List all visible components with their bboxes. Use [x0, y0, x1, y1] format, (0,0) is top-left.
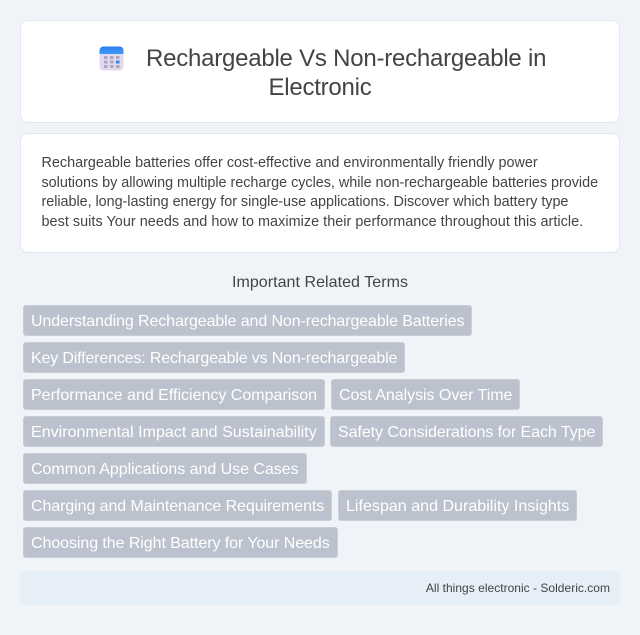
chip: understanding	[23, 305, 472, 336]
section heading: Important Related Terms	[232, 274, 408, 291]
chip: charging	[23, 490, 332, 521]
title: Electronic	[268, 74, 372, 101]
chip: lifespan	[338, 490, 577, 521]
chip: performance: Performance and Efficiency Comparison	[31, 387, 317, 404]
chip: lifespan: Lifespan and Durability Insights	[346, 498, 569, 515]
chip: cost: Cost Analysis Over Time	[339, 387, 512, 404]
chip: cost	[331, 379, 520, 410]
icon: calendar	[100, 46, 124, 70]
chip: applications	[23, 453, 307, 484]
chip: environmental: Environmental Impact and Sustainability	[31, 424, 317, 441]
chip: key differences: Key Differences: Rechargeable vs Non-rechargeable	[31, 350, 397, 367]
chip: environmental	[23, 416, 325, 447]
intro text	[42, 155, 598, 230]
title	[146, 45, 546, 101]
intro text: Rechargeable batteries offer cost-effective and environmentally friendly power	[42, 155, 538, 171]
chip: understanding: Understanding Rechargeable and Non-rechargeable Batteries	[31, 313, 464, 330]
chip: choosing: Choosing the Right Battery for Your Needs	[31, 535, 330, 552]
chip: safety: Safety Considerations for Each Type	[338, 424, 595, 441]
intro text: best suits Your needs and how to maximize their performance throughout this article.	[42, 214, 583, 230]
chip: performance	[23, 379, 325, 410]
chip: choosing	[23, 527, 338, 558]
term chips	[23, 305, 603, 558]
header panel	[20, 20, 620, 123]
intro text: solutions by allowing multiple recharge cycles, while non-rechargeable batteries provide	[42, 175, 598, 191]
intro text: reliable, long-lasting energy for single-use applications. Discover which battery type	[42, 194, 568, 210]
chip: key differences	[23, 342, 405, 373]
title: Rechargeable Vs Non-rechargeable in	[146, 45, 546, 72]
footer	[20, 571, 620, 605]
chip: safety	[330, 416, 603, 447]
chip: charging: Charging and Maintenance Requirements	[31, 498, 324, 515]
intro text panel	[20, 133, 620, 253]
footer text: All things electronic - Solderic.com	[426, 581, 610, 595]
chip: applications: Common Applications and Use Cases	[31, 461, 299, 478]
